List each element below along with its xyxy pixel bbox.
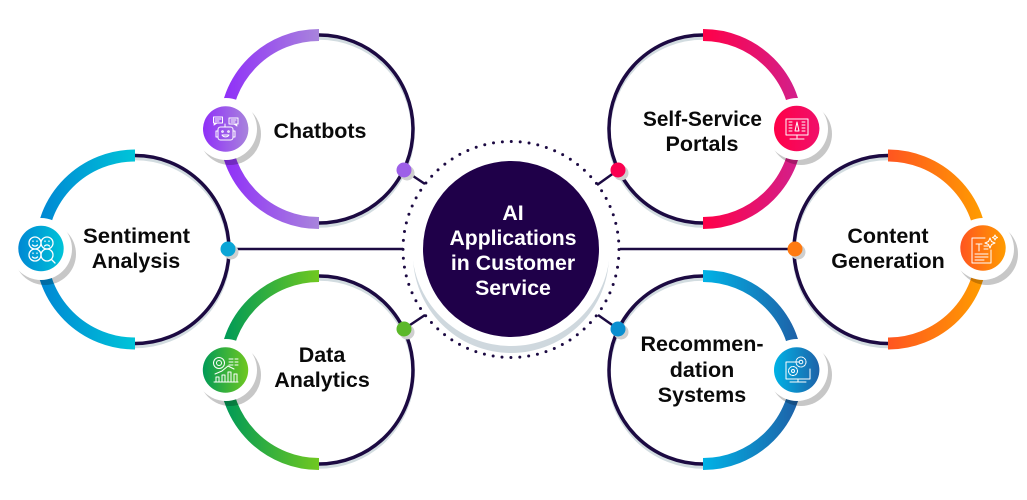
- panel: recommendation systems: [609, 276, 832, 467]
- hub title: in Customer: [451, 251, 575, 275]
- hub title: Applications: [450, 226, 576, 250]
- connector dot: [610, 322, 628, 340]
- label: [643, 107, 762, 156]
- connector dot: [396, 162, 414, 180]
- hub disc: [423, 161, 599, 337]
- label: Chatbots: [274, 119, 367, 143]
- label: [831, 224, 945, 273]
- panel: sentiment analysis: [10, 156, 238, 346]
- label: Systems: [658, 383, 746, 407]
- label: Data: [299, 343, 346, 367]
- icon: robot chat: [195, 98, 261, 165]
- icon: document sparkle: [952, 218, 1018, 285]
- ring: [794, 156, 982, 346]
- label: Self-Service: [643, 107, 762, 131]
- icon: monitor portal: [766, 98, 832, 165]
- hub title: [450, 201, 576, 300]
- icon: monitor gears: [766, 339, 832, 406]
- ring: [609, 276, 797, 467]
- connector dot: [396, 322, 414, 340]
- label: [83, 224, 190, 273]
- hub white ring: [412, 148, 610, 346]
- label: Analysis: [92, 249, 180, 273]
- hub title: Service: [475, 276, 551, 300]
- panel: chatbots: [195, 35, 414, 226]
- central hub: [403, 142, 619, 358]
- connector dot: [220, 242, 238, 260]
- ring: [225, 276, 413, 467]
- label: Portals: [666, 132, 738, 156]
- label: Generation: [831, 249, 945, 273]
- icon: charts: [195, 339, 261, 406]
- hub title: AI: [502, 201, 524, 225]
- connector dot: [610, 162, 628, 180]
- panel: self-service portals: [609, 35, 832, 226]
- panel: content generation: [788, 156, 1018, 346]
- label: Analytics: [274, 368, 370, 392]
- label: Recommen-: [640, 332, 764, 356]
- ring: [41, 156, 229, 346]
- icon: faces and magnifier: [10, 218, 76, 285]
- label: Content: [847, 224, 929, 248]
- hub shadow crescent: [413, 157, 609, 353]
- ring: [609, 35, 797, 226]
- dotted ring: [403, 142, 619, 358]
- ring: [225, 35, 413, 226]
- connector lines: [228, 170, 795, 329]
- label: [640, 332, 764, 407]
- label: Sentiment: [83, 224, 190, 248]
- label: dation: [670, 358, 734, 382]
- connector dot: [788, 242, 806, 260]
- panel: data analytics: [195, 276, 414, 467]
- label: [274, 343, 370, 392]
